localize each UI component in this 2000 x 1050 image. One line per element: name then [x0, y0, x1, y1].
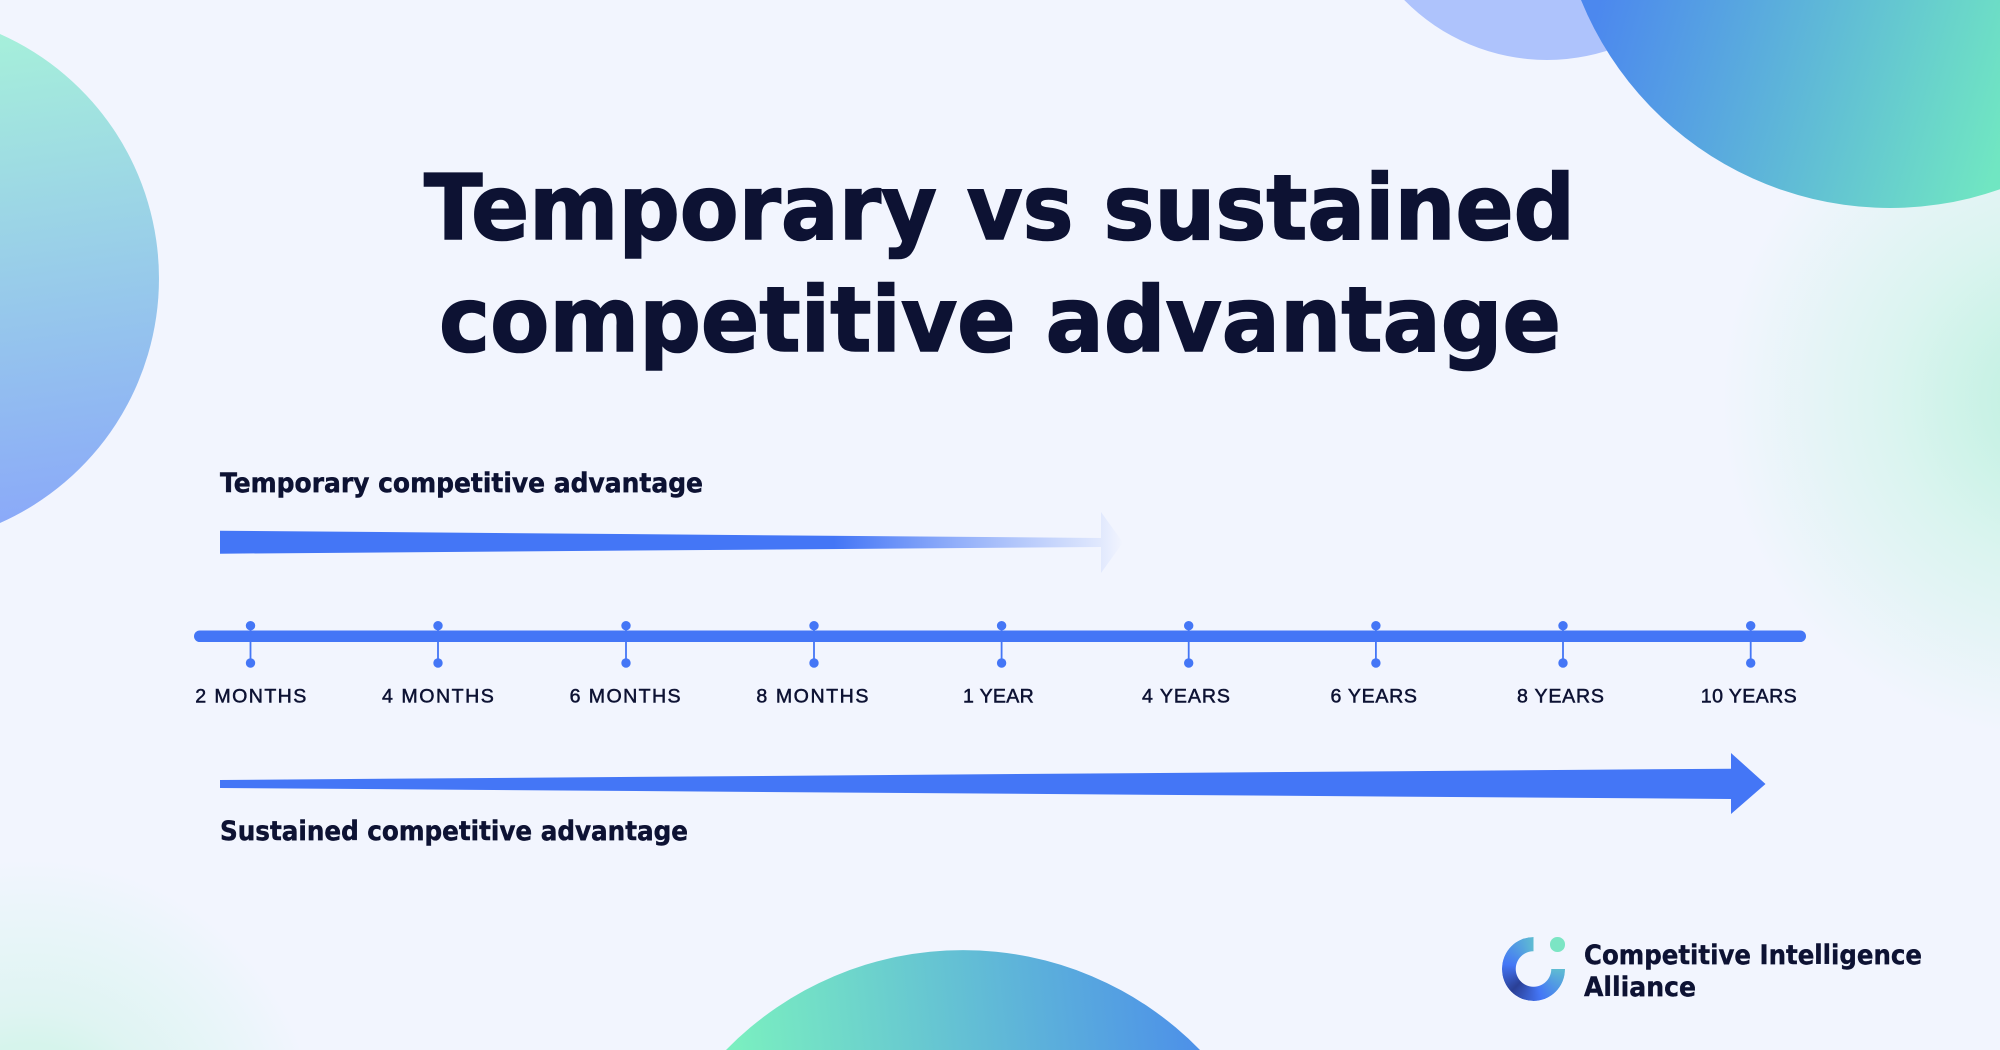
tick: 8 months — [809, 621, 819, 668]
logo dot — [1550, 937, 1565, 952]
tick: 4 years — [1184, 621, 1193, 668]
tick: 8 years — [1558, 621, 1568, 668]
tick: 10 years — [1746, 621, 1755, 668]
decorative circle top right — [1581, 0, 2000, 208]
arrow: sustained advantage — [220, 753, 1766, 814]
brand name: Competitive Intelligence — [1584, 940, 1922, 971]
soft green glow bottom-left — [0, 855, 325, 1050]
timeline labels: 10 YEARS — [1701, 686, 1797, 708]
tick: 2 months — [246, 621, 255, 668]
timeline labels: 4 YEARS — [1142, 686, 1230, 708]
title — [424, 156, 1575, 373]
timeline labels — [195, 686, 1797, 708]
title: Temporary vs sustained — [424, 156, 1575, 261]
timeline labels: 8 YEARS — [1517, 686, 1604, 708]
timeline labels: 6 MONTHS — [570, 686, 681, 708]
timeline labels: 1 YEAR — [963, 686, 1034, 708]
decorative pale circle top — [1404, 0, 1690, 60]
axis bar — [194, 630, 1806, 642]
timeline axis — [194, 621, 1806, 668]
timeline labels: 4 MONTHS — [382, 686, 494, 708]
arrow: temporary advantage fading out — [220, 512, 1123, 573]
timeline labels: 8 MONTHS — [756, 686, 868, 708]
title: competitive advantage — [439, 268, 1561, 373]
logo ring — [1502, 937, 1565, 1001]
timeline labels: 2 MONTHS — [195, 686, 306, 708]
soft green glow right — [1720, 60, 2000, 740]
timeline labels: 6 YEARS — [1330, 686, 1417, 708]
tick: 4 months — [433, 621, 443, 668]
decorative circle left — [0, 34, 159, 523]
tick: 6 months — [621, 621, 631, 668]
heading: sustained competitive advantage: Sustained competitive advantage — [220, 816, 688, 847]
tick: 6 years — [1371, 621, 1381, 668]
tick: 1 year — [997, 621, 1006, 668]
brand name — [1584, 940, 1922, 1003]
brand name: Alliance — [1584, 972, 1696, 1003]
decorative circle bottom — [726, 950, 1200, 1050]
heading: temporary competitive advantage: Temporary competitive advantage — [220, 468, 703, 499]
